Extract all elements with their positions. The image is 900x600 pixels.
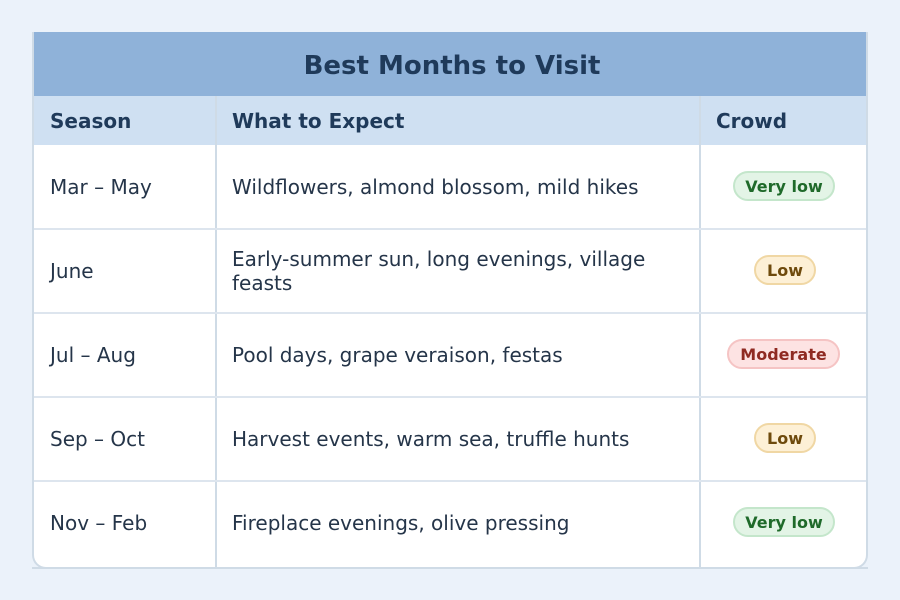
- row: June: [48, 247, 816, 295]
- row: Mar–May: [50, 171, 835, 201]
- row: Sep–Oct: Sep – Oct: [50, 427, 145, 451]
- title bar: Best Months to Visit: [304, 51, 600, 81]
- row: Mar–May: Mar – May: [50, 175, 152, 199]
- row: June: June: [50, 259, 94, 283]
- row: Mar–May: Wildflowers, almond blossom, mild hikes: [232, 175, 638, 199]
- title bar: [34, 32, 870, 96]
- header row: [34, 96, 870, 145]
- row: Sep–Oct: Low: [767, 428, 803, 448]
- row: Mar–May: Very low: [745, 176, 823, 196]
- row: Sep–Oct: Harvest events, warm sea, truffle hunts: [232, 427, 629, 451]
- row: Jul–Aug: Pool days, grape veraison, festas: [232, 343, 563, 367]
- row: Jul–Aug: Moderate: [740, 344, 827, 364]
- header: crowd: Crowd: [716, 108, 787, 132]
- row: Sep–Oct: [50, 423, 816, 453]
- row: Nov–Feb: [50, 507, 835, 537]
- row: Nov–Feb: Fireplace evenings, olive pressing: [232, 511, 569, 535]
- row: Nov–Feb: Very low: [745, 512, 823, 532]
- row: Jul–Aug: [48, 339, 840, 369]
- row: June: Low: [767, 260, 803, 280]
- row: June: Early-summer sun, long evenings, village feasts: [232, 247, 645, 295]
- row: Nov–Feb: Nov – Feb: [50, 511, 147, 535]
- row: Jul–Aug: Jul – Aug: [50, 343, 136, 367]
- header: season: Season: [50, 108, 131, 132]
- header: what to expect: What to Expect: [232, 108, 404, 132]
